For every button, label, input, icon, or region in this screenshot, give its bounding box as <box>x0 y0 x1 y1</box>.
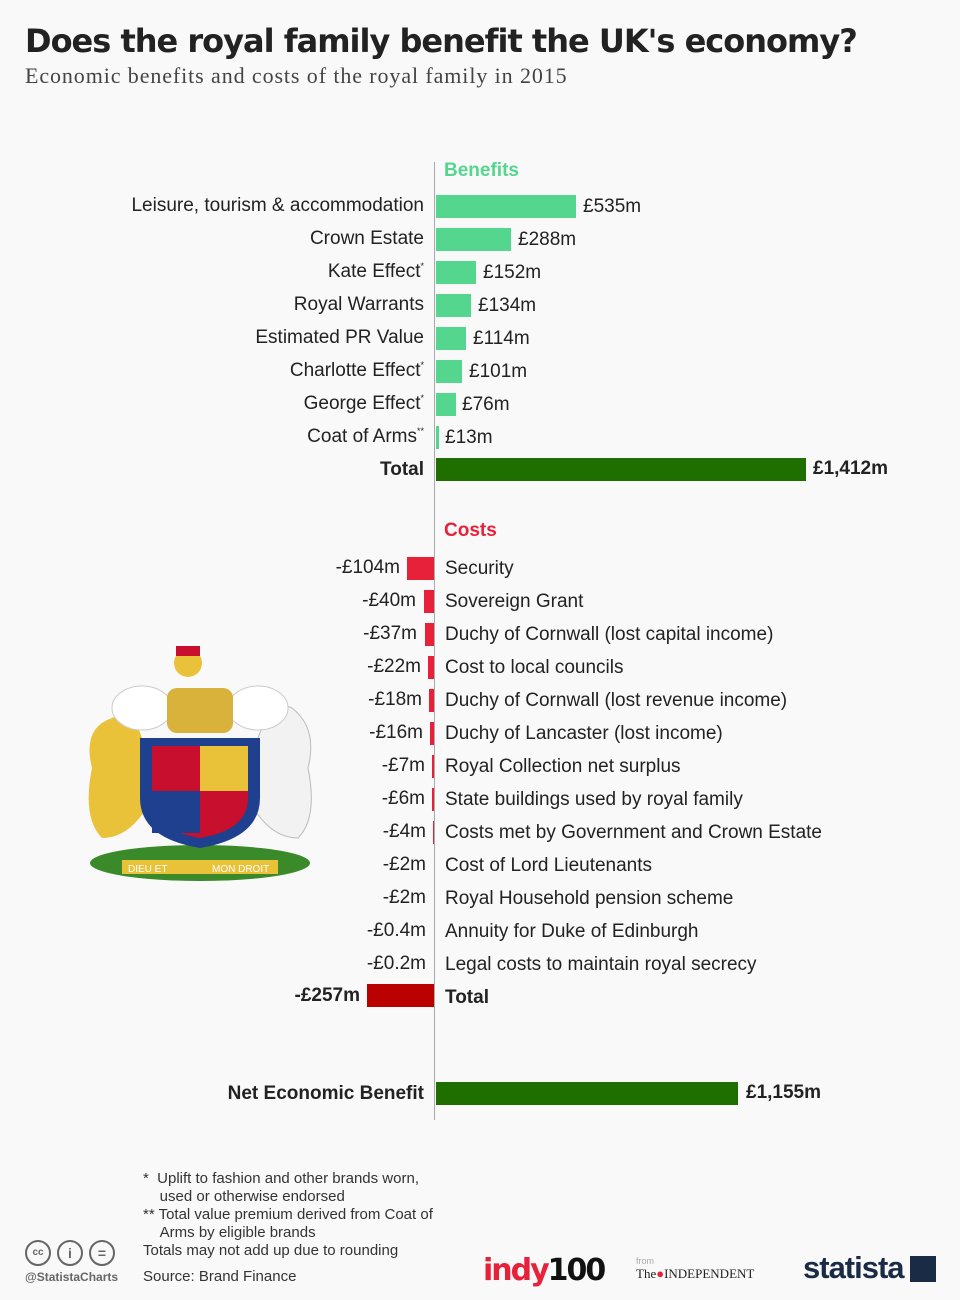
footnotes: * Uplift to fashion and other brands worn, <box>143 1170 419 1187</box>
net economic benefit: £1,155m <box>746 1082 821 1103</box>
costs chart <box>294 557 822 1008</box>
costs chart: Duchy of Cornwall (lost capital income) <box>445 624 773 645</box>
icon: creative commons: i <box>68 1245 72 1261</box>
costs chart: Cost to local councils <box>445 657 623 678</box>
source: Source: Brand Finance <box>143 1268 296 1285</box>
costs chart: Security <box>445 558 514 579</box>
icon: creative commons: cc <box>32 1247 44 1258</box>
icon: creative commons <box>25 1240 115 1266</box>
benefits chart: £134m <box>478 295 536 316</box>
costs chart: -£104m <box>336 557 400 578</box>
benefits heading: Benefits <box>444 160 519 181</box>
benefits chart: £13m <box>445 427 493 448</box>
benefits chart: Royal Warrants <box>294 294 424 315</box>
costs chart: -£7m <box>382 755 425 776</box>
costs chart: -£16m <box>369 722 423 743</box>
benefits chart: Charlotte Effect* <box>290 360 424 381</box>
benefits chart: £152m <box>483 262 541 283</box>
icon: creative commons: = <box>98 1245 106 1261</box>
benefits chart: Leisure, tourism & accommodation <box>131 195 424 216</box>
costs chart: -£2m <box>383 887 426 908</box>
costs chart: Duchy of Cornwall (lost revenue income) <box>445 690 787 711</box>
costs chart: -£4m <box>383 821 426 842</box>
costs chart: -£18m <box>368 689 422 710</box>
logo: the independent: The●INDEPENDENT <box>636 1266 754 1281</box>
benefits chart: £101m <box>469 361 527 382</box>
footnotes: used or otherwise endorsed <box>160 1188 345 1205</box>
costs chart: Annuity for Duke of Edinburgh <box>445 921 698 942</box>
costs chart: Royal Collection net surplus <box>445 756 681 777</box>
benefits chart: George Effect* <box>304 393 424 414</box>
costs chart: Cost of Lord Lieutenants <box>445 855 652 876</box>
costs heading: Costs <box>444 520 497 541</box>
logo: statista: statista <box>803 1250 904 1285</box>
costs chart: -£2m <box>383 854 426 875</box>
costs chart: -£257m <box>294 985 360 1006</box>
statista handle: @StatistaCharts <box>25 1270 118 1284</box>
costs chart: -£0.2m <box>367 953 426 974</box>
title: Does the royal family benefit the UK's economy? <box>25 22 857 60</box>
footnotes: ** Total value premium derived from Coat of <box>143 1206 433 1223</box>
costs chart: Royal Household pension scheme <box>445 888 733 909</box>
icon: royal coat of arms <box>88 646 312 881</box>
costs chart: -£0.4m <box>367 920 426 941</box>
benefits chart: Crown Estate <box>310 228 424 249</box>
costs chart: -£6m <box>382 788 425 809</box>
costs chart: State buildings used by royal family <box>445 789 743 810</box>
benefits chart <box>131 195 888 481</box>
benefits chart: £288m <box>518 229 576 250</box>
footnotes: Totals may not add up due to rounding <box>143 1242 398 1259</box>
benefits chart: £76m <box>462 394 510 415</box>
costs chart: -£40m <box>362 590 416 611</box>
icon: royal coat of arms: MON DROIT <box>212 864 269 875</box>
costs chart: Sovereign Grant <box>445 591 583 612</box>
logo: the independent <box>636 1256 754 1281</box>
costs chart: Total <box>445 987 489 1008</box>
benefits chart: Total <box>380 459 424 480</box>
footnotes <box>143 1170 433 1259</box>
benefits chart: £535m <box>583 196 641 217</box>
benefits chart: Kate Effect* <box>328 261 424 282</box>
subtitle: Economic benefits and costs of the royal family in 2015 <box>25 63 568 88</box>
logo: indy100: indy100 <box>483 1253 604 1288</box>
icon: royal coat of arms: DIEU ET <box>128 864 167 875</box>
costs chart: Legal costs to maintain royal secrecy <box>445 954 757 975</box>
benefits chart: Coat of Arms** <box>307 426 424 447</box>
benefits chart: £1,412m <box>813 458 888 479</box>
costs chart: Duchy of Lancaster (lost income) <box>445 723 723 744</box>
costs chart: -£37m <box>363 623 417 644</box>
costs chart: -£22m <box>367 656 421 677</box>
benefits chart: £114m <box>473 328 530 349</box>
footnotes: Arms by eligible brands <box>160 1224 316 1241</box>
benefits chart: Estimated PR Value <box>255 327 424 348</box>
net economic benefit: Net Economic Benefit <box>228 1083 424 1104</box>
costs chart: Costs met by Government and Crown Estate <box>445 822 822 843</box>
axis line <box>434 162 435 1120</box>
logo: the independent: from <box>636 1256 654 1266</box>
net economic benefit <box>228 1082 821 1105</box>
